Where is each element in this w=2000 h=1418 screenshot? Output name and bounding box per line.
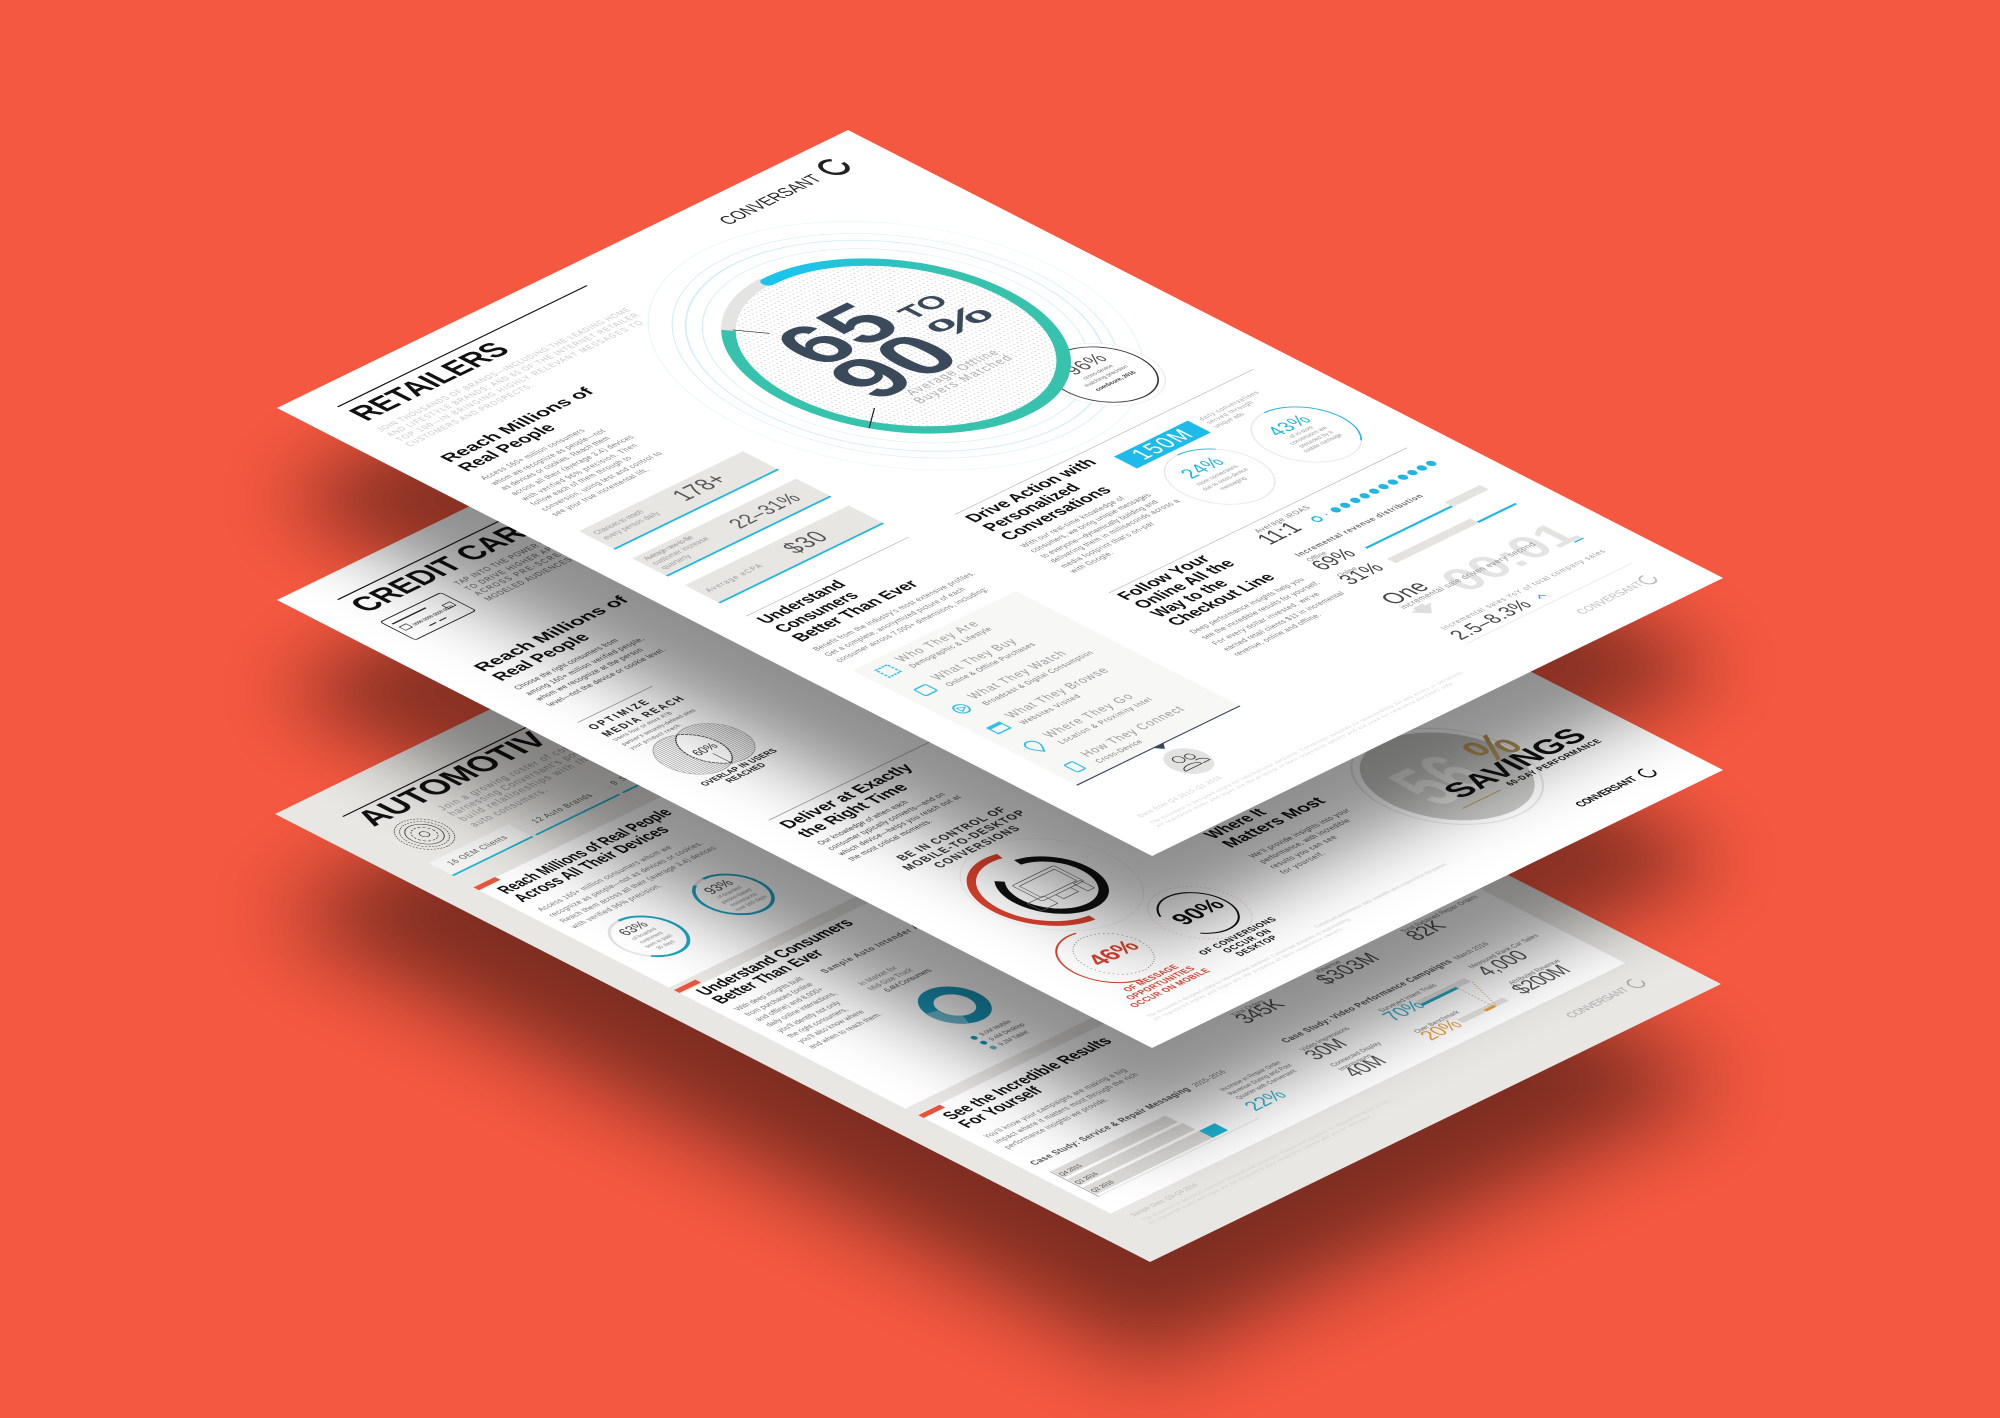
section: deliver: MOBILE-TO-DESKTOP [900, 809, 1030, 872]
stats: order totals: 82K [1400, 918, 1452, 944]
chart: 63% ring: seen in past [643, 934, 675, 949]
panel: understand consumers: Better Than Ever [708, 947, 829, 1006]
stats: video case study: Measured Rank Car Sales [1467, 933, 1541, 970]
section: drive action: Conversations [996, 484, 1116, 543]
stats: video case study: Surveyed Intent Trials [1377, 983, 1440, 1013]
header: credit cards: MODELED AUDIENCES [482, 556, 575, 602]
section: follow your online: Way to the [1146, 577, 1233, 620]
section: reach: Choose the right consumers from [511, 637, 621, 691]
section: follow your online: Checkout Line [1163, 571, 1280, 628]
row: what they watch [942, 642, 1096, 717]
row: who they are [870, 618, 994, 679]
stat: 22-31%: quarterly [658, 553, 694, 571]
section: follow your online: see the incredible results for yourself. [1198, 580, 1322, 641]
stat: one sale per second: One [1374, 577, 1435, 608]
stat: revenue distribution: Online [1334, 565, 1360, 578]
section: reach: with verified 96% precision. Then [518, 442, 640, 502]
section: reach: among 160+ million verified people, [523, 636, 647, 697]
hero numbers: % [915, 299, 1005, 343]
logo [1572, 767, 1659, 809]
footer: All registered marks and logos are the property of their respective owners. [1152, 927, 1346, 1022]
logo: CONVERSANT [713, 171, 827, 227]
stats: order totals: Total Orders [1230, 999, 1268, 1018]
stat: 43%: preceded by a [1297, 430, 1336, 449]
section: measure: results you can see [1267, 834, 1340, 870]
stat: 22-31% [632, 479, 832, 577]
small circle: 96%: matching precision [1082, 364, 1131, 388]
panel: results: You'll know your campaigns are making a big [981, 1067, 1129, 1140]
chart: device rings [923, 820, 1181, 949]
icon: credit card [380, 593, 476, 640]
section: drive action: With our real-time knowledge of [1018, 495, 1128, 549]
stat: 43%: conversions are [1288, 425, 1330, 446]
panel: understand consumers: and when to reach them. [806, 1011, 885, 1050]
stat: 56% savings: SAVINGS [1435, 724, 1596, 803]
footer: The document is designed solely for informational purposes. Conversant assumes no responsibility for any errors or omissions. [1149, 670, 1466, 825]
section: optimize media reach [577, 684, 793, 793]
bar chart [1050, 1093, 1260, 1197]
stat: 56% savings: % [1450, 726, 1536, 770]
section: reach: Real People [454, 421, 561, 474]
section: follow your online: Online All the [1130, 557, 1240, 611]
panel: results: performance insights we provide. [1001, 1097, 1111, 1150]
panel: understand consumers: daily online interactions, [763, 990, 839, 1028]
stats: order totals [1226, 894, 1498, 1027]
stat: 150M: 150M [1125, 426, 1199, 463]
section: deliver: the most critical moments. [846, 818, 935, 862]
stat: 56% savings: 60-DAY PERFORMANCE [1503, 737, 1604, 787]
section: measure: for yourself. [1277, 850, 1328, 875]
section: drive action: Drive Action with [961, 456, 1101, 525]
stat: 46% mobile [1031, 918, 1213, 1009]
row: what they browse: Websites Visited [1017, 693, 1083, 726]
stats: video case study: Video Impressions [1299, 1026, 1353, 1052]
icon: people [1153, 743, 1225, 779]
panel: understand consumers: With deep insights built [732, 975, 807, 1012]
stat: revenue distribution: Offline [1304, 550, 1330, 563]
section: reach: follow each of them through to [528, 455, 635, 507]
footer: The document is designed solely for informational purposes. Conversant assumes no responsibility for errors. [1141, 1099, 1394, 1222]
header: credit cards: TO DRIVE HIGHER APPROVALS AND LIFT [462, 509, 632, 592]
footer: Conversant performance data, available upon request from the partner. [1313, 862, 1450, 929]
hero numbers [746, 263, 1043, 411]
panel: understand consumers: you'll identify not only [774, 1000, 843, 1034]
chart: 93% ring [678, 866, 789, 922]
logo: CONVERSANT [1563, 986, 1633, 1020]
stats: video case study: 30M [1299, 1036, 1353, 1063]
panel: understand consumers: the right consumers, [784, 1006, 851, 1039]
panel: reach: Reach Millions of Real People [493, 806, 677, 896]
chart: 93% ring: 93% [699, 877, 737, 896]
stat: $30: Average eCPA [703, 562, 766, 593]
stat: 22%: Increase in Repair Order [1218, 1060, 1284, 1092]
stat: iROAS dots: Average iROAS [1252, 504, 1313, 534]
faint outer rings [547, 171, 1245, 521]
section: deliver: consumer typically converts—and on [825, 791, 948, 851]
row: what they buy: What They Buy [927, 636, 1021, 682]
stats: order totals: $303M [1310, 950, 1386, 987]
section: understand consumers: Better Than Ever [788, 577, 924, 644]
sheet base [277, 322, 1723, 1048]
row: where they go [1018, 688, 1155, 756]
header: automotive: build relationships with their [456, 750, 605, 823]
header: retailers [334, 285, 664, 448]
panel: results: 2015–2016 [1189, 1069, 1228, 1088]
stat: one sale per second: 00:01 [1426, 516, 1592, 598]
section: understand consumers [746, 537, 1003, 664]
section: follow your online: revenue, online and offline. [1231, 612, 1324, 657]
row: where they go: Where They Go [1039, 692, 1137, 740]
section: optimize media reach: OPTIMIZE [585, 699, 653, 732]
header: retailers: JOIN THOUSANDS OF BRANDS—INCLUDING THE LEADING HOME [375, 307, 634, 433]
section: reach: as devices or cookies. Reach them [498, 435, 613, 491]
section: optimize media reach: MEDIA REACH [599, 695, 688, 739]
stat: 43%: 43% [1262, 412, 1317, 439]
section: measure: Where It [1200, 806, 1272, 841]
stat strips: 12 Auto Brands [528, 792, 595, 825]
icon: credit card: 0000 0000 0000 0000 [411, 605, 456, 627]
row: what they buy [906, 633, 1038, 698]
header: retailers: TOP 100—IN BRINGING HIGHLY RELEVANT MESSAGES TO [394, 320, 646, 443]
row: where they go: Location & Proximity Intel [1055, 696, 1155, 745]
header: credit cards: TAP INTO THE POWER OF CONVERSANT [452, 510, 608, 587]
stat: 24% [1142, 438, 1297, 516]
stat: 24%: due to cross-device [1200, 467, 1251, 492]
stats: video case study: 20% [1415, 1017, 1468, 1043]
chart: 93% ring: of-branded [716, 886, 744, 900]
stat: 24%: more conversions [1194, 464, 1241, 487]
stats: video case study: Impressions [1337, 1053, 1375, 1072]
panel: understand consumers [674, 740, 1420, 1109]
section: measure [1183, 771, 1392, 876]
header: automotive: harnessing Conversant's power to [446, 738, 608, 818]
panel: understand consumers: you'll also know where [795, 1009, 867, 1044]
panel: understand consumers: 6.4M Consumers [881, 967, 934, 993]
stat: 24%: messaging [1218, 476, 1249, 491]
logo small: CONVERSANT [1574, 580, 1648, 616]
section: follow your online [1108, 448, 1535, 659]
row: how they connect: Cross-Device [1093, 739, 1145, 764]
chart: hero ring 65 to 90%: Average Offline [902, 348, 1003, 397]
stat strips: 9 Sub-Brands [607, 754, 674, 786]
stat: one sale per second [1374, 515, 1592, 622]
section: understand consumers: Understand [753, 578, 851, 626]
small circle: 96%: cross-device [1081, 363, 1116, 381]
chart: hero ring 65 to 90%: Buyers Matched [910, 353, 1016, 405]
stat: 46% mobile: 46% [1080, 937, 1146, 969]
stat: 178+ [579, 451, 779, 550]
footer: All registered marks and logos are the property of their respective owners and are used for reference purposes only. [1155, 681, 1456, 828]
panel: reach: with verified 96% precision. [567, 883, 664, 930]
section: reach: whom we recognize as people—not [487, 428, 608, 487]
section: reach [469, 594, 700, 708]
header: automotive [341, 695, 669, 856]
stat: incremental sales: Incremental sales YoY of total company sales [1438, 548, 1608, 631]
panel: understand consumers: Understand Consumers [692, 917, 858, 998]
chart: venn [637, 715, 771, 782]
logo [711, 157, 854, 227]
section: deliver [768, 740, 1067, 889]
stats: video case study: Case Study: Video Performance Campaigns [1278, 958, 1455, 1044]
panel: understand consumers: Mid-Size Truck [865, 967, 916, 992]
bar chart: Q2 2016 [1089, 1180, 1117, 1193]
sheet: retailers [277, 130, 1723, 856]
stat: 90% desktop: OCCUR ON [1220, 928, 1274, 954]
section: measure: Matters Most [1218, 795, 1331, 850]
stat: 150M: served through [1205, 400, 1256, 425]
section: reach: Real People [488, 631, 595, 683]
section: deliver: Deliver at Exactly [775, 761, 918, 831]
row: what they watch: Broadcast & Digital Consumption [980, 650, 1096, 706]
section: follow your online: Deep performance insights help you [1187, 576, 1307, 635]
panel: results: impact where it matters most through the rich [991, 1072, 1141, 1145]
stat: one sale per second: incremental sale driven every second [1396, 541, 1539, 610]
stat: $30: $30 [776, 528, 834, 557]
footer: Data from Q4 2015–Q1 2016 [1136, 775, 1225, 819]
header: retailers: RETAILERS [341, 338, 518, 425]
stat: 43% [1229, 396, 1384, 473]
stats: order totals: Total Retained Repair Orders [1399, 895, 1481, 934]
stat: 90% desktop: OF CONVERSIONS [1196, 916, 1279, 956]
row: what they browse: What They Browse [1001, 666, 1112, 720]
section: optimize media reach: OVERLAP IN USERS [698, 747, 780, 787]
stat: 178+: 178+ [665, 470, 734, 504]
chart: 93% ring: conversions [729, 892, 760, 908]
section: deliver: BE IN CONTROL OF [894, 806, 1010, 863]
row: who they are: Who They Are [891, 619, 982, 664]
stat: 22%: Quarter with Conversant [1234, 1069, 1299, 1101]
sheet base [275, 536, 1721, 1262]
panel: results: See the Incredible Results [938, 1035, 1117, 1122]
stat: 150M: unique ads [1212, 412, 1247, 429]
section: follow your online: Follow Your [1113, 552, 1216, 603]
chart legend [969, 1017, 1037, 1051]
section: reach: Access 160+ million consumers [478, 428, 587, 481]
stat strips [429, 740, 707, 876]
panel: understand consumers: and offline) and 8,000+ [752, 986, 827, 1023]
panel: reach: recognize as people—not as devices or cookies. [546, 840, 706, 918]
chart: donut [913, 984, 996, 1026]
icon: devices [1002, 865, 1096, 912]
chart legend: 9.2M Tablet [997, 1030, 1031, 1047]
chart: 63% ring: 63% [614, 919, 652, 938]
hero numbers: 65 [752, 292, 923, 378]
section: reach: level—not the device or cookie level. [544, 647, 668, 708]
panel: reach [473, 637, 1184, 988]
panel: understand consumers: from purchases (online [742, 981, 816, 1017]
header: retailers: CUSTOMERS AND PROSPECTS. [403, 383, 536, 448]
stat: 24%: 24% [1175, 454, 1230, 482]
chart: hero ring 65 to 90% [547, 171, 1245, 521]
stat: 43%: mobile message [1302, 432, 1345, 454]
section: follow your online: For every dollar invested, we've [1209, 591, 1322, 646]
icon: wheel [382, 813, 467, 855]
section: understand consumers: consumer across 7,000+ dimensions, including: [833, 586, 991, 663]
section: measure: performance, with incredible [1257, 817, 1353, 864]
section: understand consumers: Benefit from the industry's most extensive profiles. [811, 570, 978, 652]
section: optimize media reach: Users four or more ATB [612, 711, 675, 742]
section: understand consumers: Get a complete, anonymized picture of each [822, 586, 968, 658]
stats: video case study: March 2016 [1451, 941, 1491, 961]
header: credit cards: CREDIT CARDS [342, 504, 572, 617]
stats: video case study: $200M [1506, 962, 1577, 997]
sheet base [277, 130, 1723, 856]
stat: 46% mobile: OPPORTUNITIES [1123, 965, 1197, 1001]
section: reach: see your true incremental lift. [549, 467, 651, 517]
stat: iROAS dots: 11:1 [1250, 519, 1308, 548]
panel: understand consumers: In Market for [855, 965, 900, 987]
stats: video case study: 40M [1338, 1053, 1393, 1080]
section: reach: whom we recognize at the person [532, 647, 646, 702]
chart: 93% ring: person-based [720, 888, 754, 905]
section: deliver: Our knowledge of when each [815, 799, 911, 846]
stat strips: 16 OEM Clients [444, 834, 510, 866]
section: deliver: CONVERSIONS [931, 825, 1024, 870]
small circle: 96% [1015, 330, 1191, 419]
hero numbers: 90 [805, 322, 984, 411]
bar chart: Q1 2016 [1073, 1172, 1101, 1185]
logo [1562, 977, 1648, 1020]
header: automotive: auto consumers. [467, 787, 552, 829]
stats: video case study: 70% [1377, 998, 1431, 1024]
section: follow your online: earned retail clients $11 in incremental [1221, 590, 1347, 652]
section: drive action: Personalized [979, 481, 1085, 534]
stat: 150M: daily conversations [1197, 390, 1262, 422]
section: deliver: the Right Time [793, 781, 913, 840]
section: drive action: with Google. [1066, 550, 1116, 574]
row: who they are: Demographic & Lifestyle [906, 626, 994, 669]
stat: incremental sales: 2.5–8.3% [1445, 597, 1538, 643]
chart: 63% ring: customers [638, 931, 666, 945]
footer: All registered marks and logos are the property of their respective owners and are for reference. [1147, 1114, 1375, 1225]
section: drive action: delivering them in milliseconds across a [1047, 498, 1183, 564]
panel: dimensions list [853, 591, 1247, 789]
footer: Sample Data: Q3–Q4 2016 [1129, 1183, 1201, 1218]
stat: revenue distribution: 31% [1333, 560, 1390, 588]
panel: results [917, 864, 1625, 1214]
bar chart: Q4 2015 [1057, 1163, 1085, 1177]
chart: 93% ring: over 160 days [734, 895, 769, 912]
stat: 56% savings: 56 [1367, 744, 1511, 816]
chart: 63% ring [593, 908, 705, 964]
shadow of credit card sheet [277, 412, 1723, 1138]
section: measure: Measure Your ROI [1183, 771, 1307, 832]
header: automotive: Join a growing roster of companies [435, 728, 607, 812]
stat: revenue distribution: 69% [1305, 545, 1362, 574]
section: reach: across all their (average 3.4) devices [508, 434, 636, 497]
section: optimize media reach: your product reach. [628, 723, 685, 751]
stat: 22-31%: Average new-to-file [641, 534, 696, 562]
row: what they browse [979, 666, 1123, 736]
stats: video case study: Attributed Revenue [1507, 959, 1563, 986]
chart: 63% ring: of-boarded [630, 927, 659, 941]
stats: video case study: 4,000 [1471, 948, 1534, 979]
sheet: credit cards [277, 322, 1723, 1048]
stat: $30 [685, 505, 884, 603]
stat: iROAS dots [1246, 451, 1443, 548]
hero numbers: TO [892, 291, 956, 323]
logo: CONVERSANT [1572, 775, 1641, 809]
chart: 63% ring: 30 days [655, 940, 677, 951]
section: drive action: to everyone—dynamically building and [1038, 499, 1161, 559]
section: drive action: consumers, we bring unique messages [1027, 492, 1154, 554]
stat: 43%: of in-store [1287, 425, 1317, 439]
footer: The document is designed solely for informational purposes. Conversant assumes no responsibility. [1146, 917, 1353, 1018]
chart legend: 9.4M Desktop [987, 1022, 1027, 1042]
stat: 150M [1113, 388, 1276, 469]
row: how they connect: How They Connect [1077, 704, 1188, 759]
stat: 46% mobile: OF MESSAGE [1120, 963, 1181, 993]
stat: 90% desktop: 90% [1164, 895, 1231, 928]
panel: results: For Yourself [954, 1084, 1048, 1130]
stat: revenue distribution [1291, 473, 1522, 588]
section: measure: We'll provide insights into your [1246, 807, 1353, 859]
section: drive action [955, 369, 1372, 575]
stat: 22% [1215, 1059, 1325, 1114]
small circle: 96%: comScore, 2016 [1093, 370, 1139, 392]
section: reach: Reach Millions of [436, 385, 599, 465]
stats: video case study: Connected Display [1329, 1041, 1384, 1068]
header: retailers: AND LIFESTYLE BRANDS, AND 65 OF THE INTERNET RETAILER [384, 312, 641, 438]
section: reach: conversion, using test and control to [538, 450, 665, 512]
stat: 178+: every person daily [600, 510, 662, 541]
panel: results: Case Study: Service & Repair Messaging [1027, 1086, 1193, 1166]
panel: reach: Across All Their Devices [509, 824, 674, 904]
stat: 22-31%: 22–31% [724, 490, 807, 531]
stat: 22%: Revenue During and Post [1226, 1063, 1295, 1096]
shadow of retailers sheet [277, 220, 1723, 946]
section: reach [436, 385, 702, 518]
row: how they connect [1057, 704, 1199, 774]
section: drive action: media footprint that's on-par [1058, 520, 1157, 569]
stat: revenue distribution: Incremental revenue distribution [1293, 493, 1426, 558]
footer [1138, 862, 1464, 1022]
stats: order totals: Revenue [1314, 960, 1344, 974]
row: what they watch: What They Watch [964, 649, 1070, 701]
stat: 90% desktop: DESKTOP [1233, 934, 1280, 957]
stats: video case study [1276, 924, 1597, 1082]
shadow of automotive sheet [275, 636, 1724, 1363]
header: credit cards: ACROSS PRE-SCREENED AND [472, 530, 608, 597]
panel: reach: Reach them across all their (average 3.4) devices [557, 845, 719, 924]
section: optimize media reach: partner's securely-defined sites [620, 709, 698, 747]
section: understand consumers: Consumers [770, 589, 864, 635]
header: credit cards [337, 478, 665, 639]
chart: venn: 60% [688, 741, 722, 758]
stat: 22%: 22% [1239, 1087, 1293, 1114]
sheet: automotive [275, 536, 1721, 1262]
section: reach: Reach Millions of [470, 594, 634, 674]
small circle: 96%: 96% [1058, 351, 1113, 378]
header: automotive: AUTOMOTIVE [347, 718, 577, 831]
stat: 178+: Chances to reach [590, 509, 646, 536]
stats: video case study: Over Benchmark [1413, 1010, 1463, 1034]
stat: 22-31%: customer increase [649, 536, 712, 566]
chart legend: 9.0M Mobile [978, 1019, 1014, 1037]
stat: 46% mobile: OCCUR ON MOBILE [1127, 967, 1213, 1009]
stat: 90% desktop [1119, 876, 1299, 966]
section: optimize media reach: REACHED [722, 761, 768, 784]
row: what they buy: Online & Offline Purchases [943, 641, 1038, 688]
ring arcs [697, 281, 797, 330]
stats: order totals: 345K [1229, 996, 1291, 1027]
panel: understand consumers: Sample Auto Intender Audience [818, 907, 955, 975]
section: deliver: which device—helps you reach out at [834, 794, 964, 857]
panel: reach: Access 160+ million consumers whom we [535, 844, 674, 913]
stat: 56% savings [1312, 683, 1635, 844]
